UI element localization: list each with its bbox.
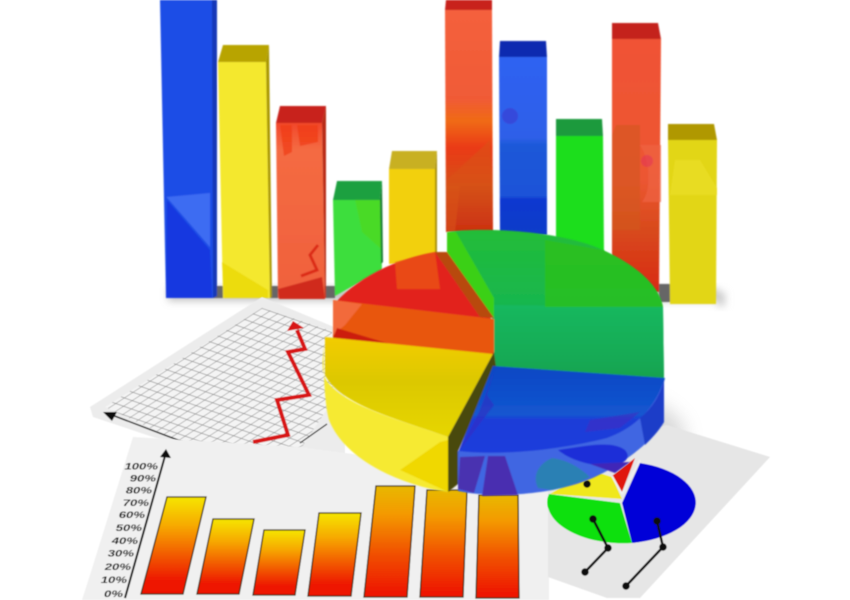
slice: yellow: [323, 337, 496, 492]
paper: line graph sheet: [90, 297, 345, 470]
bars: yellow to red gradient: [141, 486, 519, 598]
floor shadows beneath bars: [168, 288, 725, 306]
bar: yellow right: [668, 124, 717, 304]
arrow: percent axis: [125, 449, 171, 598]
bar: tall blue: [160, 0, 217, 298]
pointer lines: [582, 482, 666, 588]
bar: red right: [612, 23, 661, 292]
grid: [105, 308, 333, 450]
axis labels: 40%: [111, 537, 138, 546]
slice: green: [447, 230, 664, 379]
arrow: red zigzag trend: [253, 321, 309, 442]
axis labels: 70%: [123, 499, 149, 508]
bar: green: [333, 181, 383, 296]
gaps between bars: [213, 284, 670, 302]
small pie chart: [547, 458, 696, 543]
slice: blue: [458, 366, 665, 496]
bar: yellow small: [389, 151, 437, 264]
axis labels: 100%: [124, 462, 158, 472]
bar: yellow: [218, 45, 272, 298]
bar chart: 3D bars: [160, 0, 717, 304]
bar: red: [276, 106, 326, 299]
axis line right: [300, 424, 327, 443]
axis labels: 90%: [130, 474, 156, 484]
axis labels: [101, 462, 158, 599]
axis labels: 60%: [119, 511, 145, 520]
soft shadow around pie: [435, 385, 685, 485]
slice: red: [333, 252, 494, 356]
axis labels: 10%: [101, 576, 127, 585]
axis labels: 30%: [108, 549, 134, 559]
axis labels: 20%: [104, 563, 131, 572]
axis labels: 50%: [116, 524, 142, 533]
bar: blue: [499, 41, 547, 235]
axis labels: 0%: [104, 590, 123, 599]
paper: pie chart sheet: [547, 425, 770, 598]
axis labels: 80%: [126, 486, 152, 496]
arrow: black axis left: [103, 412, 183, 442]
3D pie chart: [323, 230, 665, 496]
bar: red tall: [445, 0, 493, 232]
bar: green tall: [556, 119, 604, 255]
paper: bar chart sheet: [82, 437, 549, 600]
